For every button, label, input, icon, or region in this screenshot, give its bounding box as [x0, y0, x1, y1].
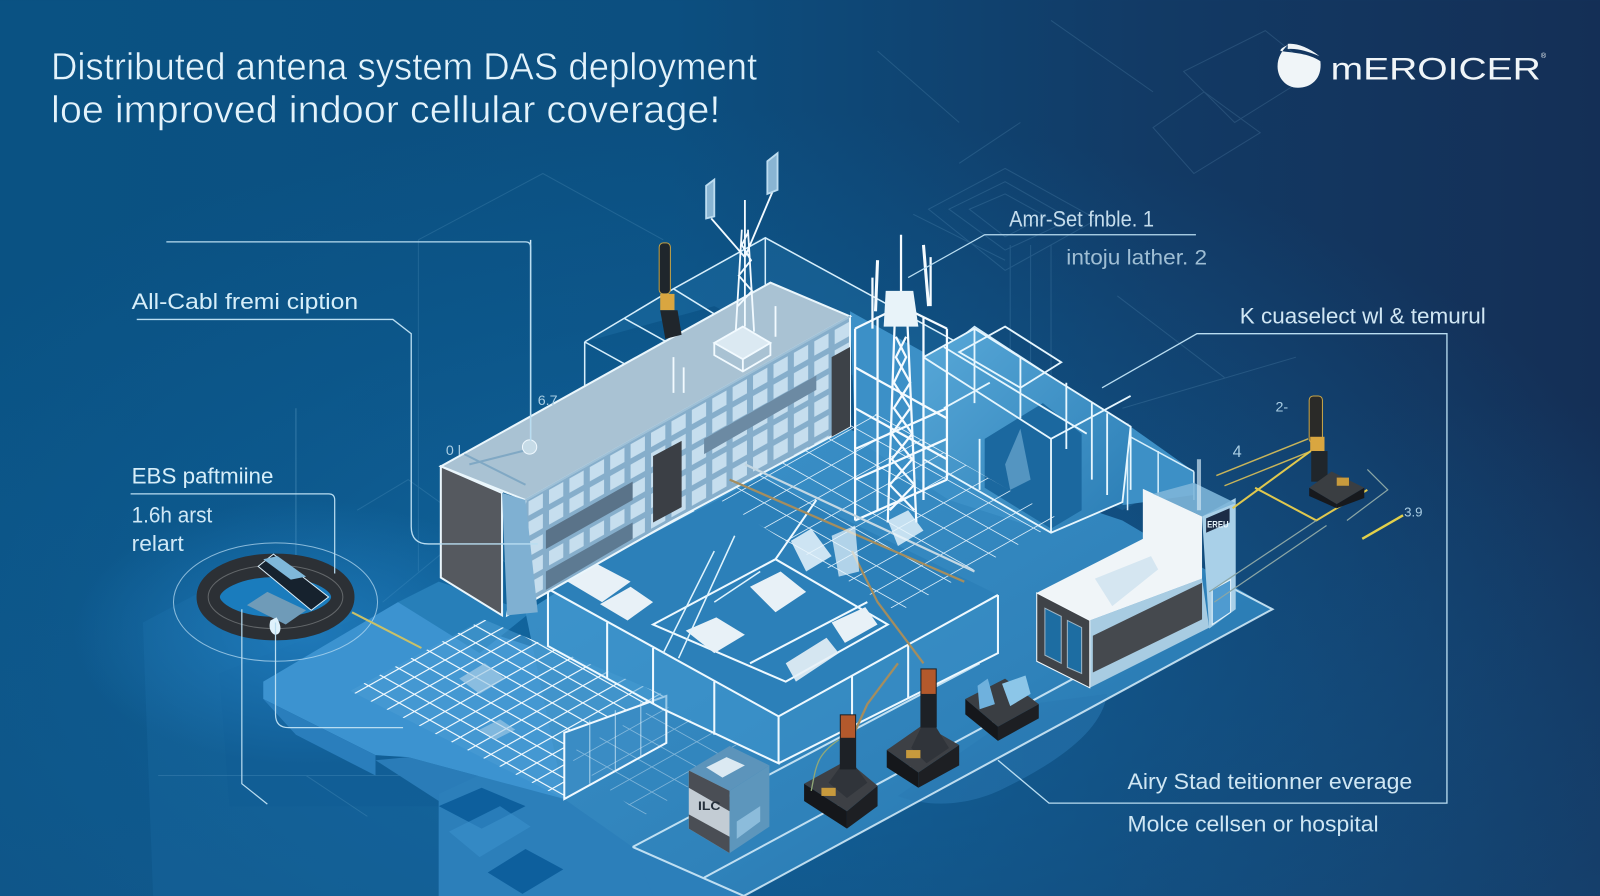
connector floor grid (left)	[350, 619, 745, 816]
floor equipment details	[791, 510, 923, 577]
fibre coil device	[173, 543, 421, 661]
small annotations	[446, 393, 1423, 519]
wireframe glass building	[923, 327, 1131, 533]
rooftop panel antenna	[659, 243, 682, 339]
title: Distributed antena system DAS deployment	[51, 46, 758, 88]
arc reflection below floor	[898, 694, 1107, 804]
label: K cuaselect: K cuaselect wl & temurul	[1240, 304, 1486, 329]
title	[51, 46, 758, 130]
main floor plate	[526, 429, 1272, 896]
title: loe improved indoor cellular coverage!	[51, 88, 720, 130]
raised platform slab	[263, 582, 564, 799]
base block: dim left structure	[143, 408, 444, 896]
rack server cabinet	[689, 746, 769, 853]
label: EBS: EBS paftmiine	[132, 464, 273, 489]
equipment unit A	[804, 714, 878, 829]
central wireframe room	[548, 413, 1061, 763]
small annotations: 6.7	[538, 393, 558, 409]
pipe run across floor	[730, 464, 974, 760]
yellow jumper	[1362, 515, 1403, 539]
label: All-Cabl: All-Cabl fremi ciption	[132, 289, 358, 314]
main building	[441, 240, 850, 615]
equipment unit B	[887, 668, 959, 788]
small annotations: 3.9	[1404, 504, 1423, 519]
label: Molce: Molce cellsen or hospital	[1128, 812, 1379, 837]
wireframe rooftop enclosure	[585, 237, 1194, 533]
logo mark	[1278, 44, 1321, 88]
label: intoju: intoju lather. 2	[1066, 245, 1207, 269]
building sign: EREU	[1207, 520, 1229, 530]
small annotations: 4	[1233, 443, 1242, 461]
roof dish	[522, 440, 537, 454]
main lattice tower	[855, 235, 947, 522]
callout leader: K cuaselect	[998, 334, 1447, 803]
logo	[1278, 44, 1547, 88]
base block: lower plinth with recesses	[376, 704, 750, 896]
rooftop lattice tower with antennas	[673, 153, 778, 393]
room furniture	[559, 561, 878, 682]
equipment unit C	[965, 676, 1039, 741]
logo: ®	[1541, 52, 1547, 60]
label: Airy Stad: Airy Stad teitionner everage	[1128, 769, 1412, 794]
label: relart: relart	[132, 531, 184, 556]
small annotations: 0 l	[446, 443, 461, 459]
glow under coil and platform	[71, 500, 541, 765]
callout leader: All-Cable	[137, 242, 538, 544]
logo: mEROICER	[1331, 51, 1541, 87]
callout leader: Amr-Set	[908, 235, 1196, 278]
remote antenna unit with yellow feed lines	[1209, 396, 1403, 602]
cabinet label: ILC	[698, 799, 721, 813]
fibre lead	[352, 612, 421, 648]
base outline lines	[633, 587, 1272, 896]
small white building	[1037, 459, 1236, 688]
label: 1.6h arst: 1.6h arst	[132, 502, 213, 527]
small annotations: 2-	[1276, 399, 1288, 415]
label: Amr-Set: Amr-Set fnble. 1	[1009, 207, 1154, 232]
callout leader: EBS	[131, 494, 403, 804]
faint blueprint lines	[296, 20, 1316, 622]
